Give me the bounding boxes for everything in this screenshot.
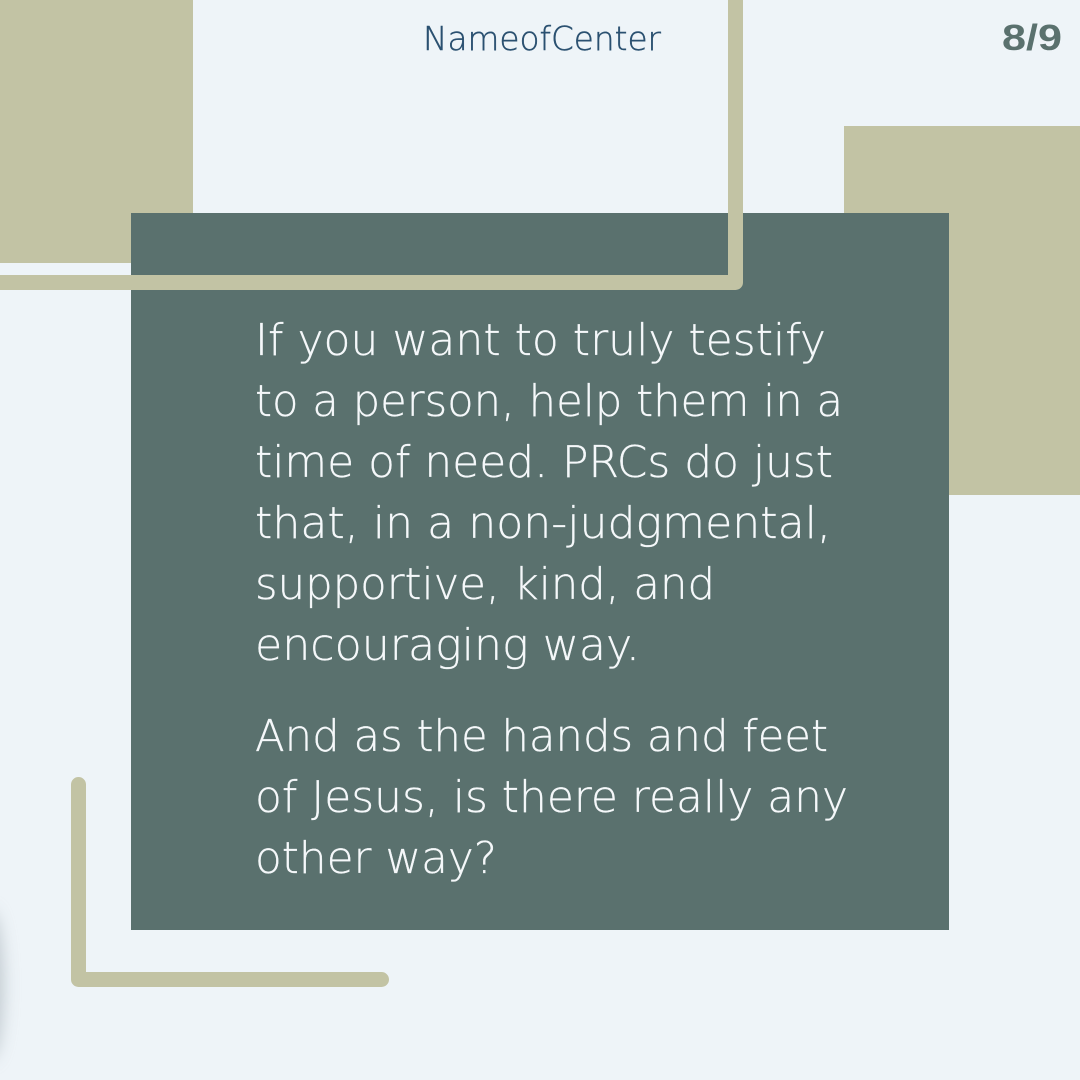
block: right olive square — [844, 126, 1080, 495]
paragraph: hands and feet — [255, 711, 848, 884]
bracket: bottom-left frame line — [78, 784, 382, 980]
paragraph: testify: time of need. PRCs do just — [255, 437, 833, 488]
paragraph: testify: encouraging way. — [255, 620, 640, 671]
paragraph: hands and feet: And as the hands and feet — [255, 711, 828, 762]
text block: main message — [255, 315, 848, 884]
paragraph: testify: supportive, kind, and — [255, 559, 715, 610]
page number: 8/9 — [1002, 17, 1062, 58]
paragraph: testify: that, in a non-judgmental, — [255, 498, 831, 549]
paragraph: hands and feet: other way? — [255, 833, 497, 884]
block: top-left olive square — [0, 0, 193, 263]
paragraph: testify: to a person, help them in a — [255, 376, 843, 427]
paragraph: testify: If you want to truly testify — [255, 315, 826, 366]
panel: main text background — [131, 213, 949, 930]
paragraph: hands and feet: of Jesus, is there really any — [255, 772, 848, 823]
paragraph: testify — [255, 315, 843, 671]
bracket: top frame line — [0, 0, 736, 282]
soft shadow at left edge — [0, 910, 2, 1060]
header: center name: NameofCenter — [423, 19, 661, 58]
